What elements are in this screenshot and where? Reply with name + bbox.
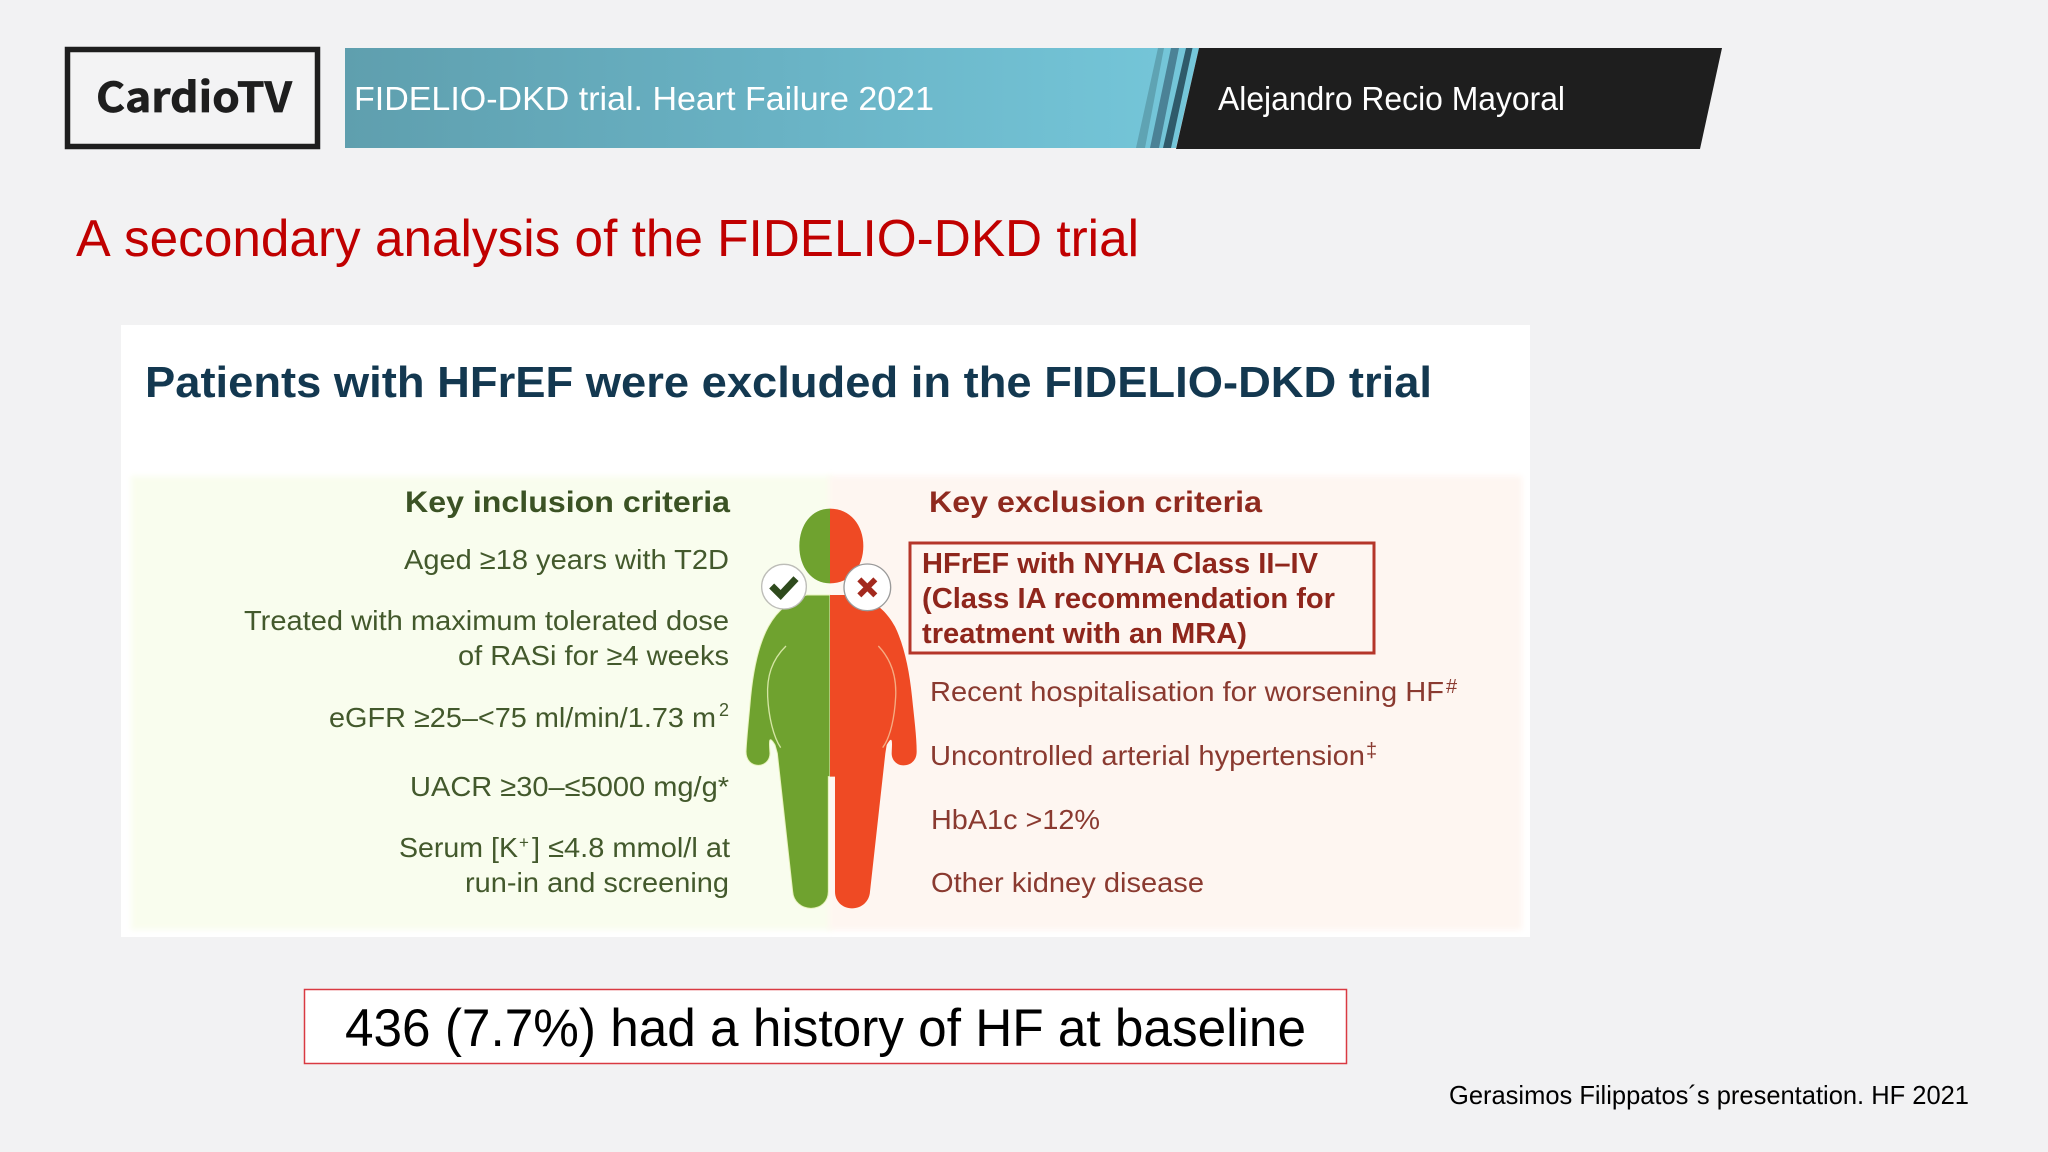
inclusion: serum potassium: Serum [K	[399, 832, 518, 863]
exclusion: recent hospitalisation: Recent hospitalisation for worsening HF	[930, 676, 1444, 707]
inclusion heading: Key inclusion criteria	[405, 486, 730, 519]
source note: Gerasimos Filippatos´s presentation. HF 2021	[1449, 1080, 1969, 1110]
inclusion: serum potassium	[399, 832, 730, 898]
panel: trial criteria	[121, 325, 1530, 937]
header banner: presenter name: Alejandro Recio Mayoral	[1218, 80, 1565, 117]
inclusion: serum potassium: run-in and screening	[465, 867, 729, 898]
exclusion: hypertension: Uncontrolled arterial hypertension	[930, 740, 1365, 771]
callout: HFrEF exclusion	[910, 543, 1374, 653]
header banner: trial title: FIDELIO-DKD trial. Heart Failure 2021	[354, 80, 934, 117]
icon: check mark badge	[762, 564, 806, 609]
inclusion: serum potassium: ] ≤4.8 mmol/l at	[532, 832, 730, 863]
inclusion: eGFR: 2	[719, 700, 729, 720]
slide heading: secondary analysis of the FIDELIO-DKD trial	[124, 210, 1139, 268]
header banner: presenter name	[1176, 48, 1722, 149]
inclusion: UACR: UACR ≥30–≤5000 mg/g*	[410, 771, 729, 802]
callout: HFrEF exclusion: treatment with an MRA)	[922, 618, 1247, 650]
exclusion: hypertension: ‡	[1366, 740, 1377, 762]
inclusion: eGFR: eGFR ≥25–<75 ml/min/1.73 m	[329, 702, 716, 733]
inclusion: age: Aged ≥18 years with T2D	[404, 544, 729, 575]
exclusion: kidney disease: Other kidney disease	[931, 867, 1204, 898]
inclusion: serum potassium: +	[519, 833, 529, 852]
inclusion: RASi treatment: of RASi for ≥4 weeks	[458, 640, 729, 671]
exclusion: HbA1c: HbA1c >12%	[931, 804, 1100, 835]
slide heading: A	[76, 210, 111, 268]
callout: HFrEF exclusion: (Class IA recommendation for	[922, 583, 1335, 615]
inclusion: RASi treatment: Treated with maximum tolerated dose	[244, 605, 729, 636]
exclusion heading: Key exclusion criteria	[929, 486, 1262, 519]
callout: HFrEF exclusion: HFrEF with NYHA Class II–IV	[922, 548, 1319, 580]
panel: inclusion criteria	[131, 476, 833, 930]
logo: CardioTV	[68, 50, 318, 146]
panel heading: Patients with HFrEF were excluded in the FIDELIO-DKD trial	[145, 358, 1432, 407]
header banner: trial title	[345, 48, 1199, 148]
figure: left half, green	[746, 509, 830, 908]
logo: CardioTV: CardioTV	[96, 64, 293, 124]
icon: human figure split green and red	[746, 509, 917, 908]
figure: right half, red	[830, 509, 917, 908]
exclusion: recent hospitalisation: #	[1446, 676, 1458, 698]
icon: cross badge	[844, 564, 891, 611]
inclusion: RASi treatment	[244, 605, 729, 671]
panel: exclusion criteria	[829, 476, 1522, 930]
callout: history of HF: 436 (7.7%) had a history of HF at baseline	[345, 999, 1306, 1058]
